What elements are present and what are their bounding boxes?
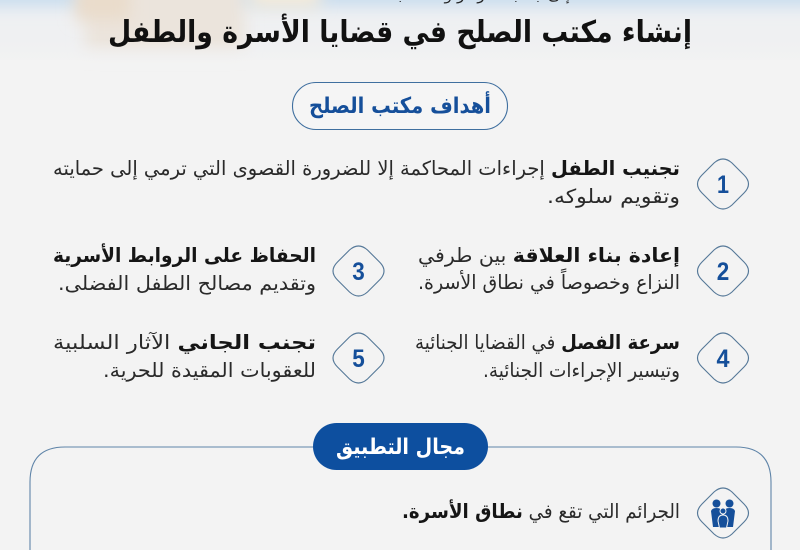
goal 1 xyxy=(53,157,748,209)
goal 4 text xyxy=(415,331,680,382)
goal 1 text: وتقويم سلوكه. xyxy=(547,185,680,208)
goal 3 text: الحفاظ على الروابط الأسرية xyxy=(53,242,316,267)
goal 2 text: إعادة بناء العلاقة بين طرفي xyxy=(418,244,680,267)
goals heading pill: أهداف مكتب الصلح xyxy=(309,90,491,119)
goal 3 text xyxy=(53,242,316,295)
icon: number 3 diamond: 3 xyxy=(352,258,365,286)
scope text: الجرائم التي تقع في نطاق الأسرة. xyxy=(402,498,680,523)
goal 5 xyxy=(53,331,384,383)
goal 4 text: سرعة الفصل في القضايا الجنائية xyxy=(415,331,680,354)
goal 3 text: وتقديم مصالح الطفل الفضلى. xyxy=(58,272,316,295)
goal 4 xyxy=(415,331,748,383)
icon: number 2 diamond: 2 xyxy=(717,258,729,286)
icon: number 5 diamond: 5 xyxy=(352,345,365,373)
goal 2 text: النزاع وخصوصاً في نطاق الأسرة. xyxy=(418,268,680,294)
icon: number 1 diamond xyxy=(698,159,748,209)
icon: number 1 diamond: 1 xyxy=(717,171,729,199)
scope heading pill: مجال التطبيق xyxy=(336,435,465,460)
goal 5 text: تجنب الجاني الآثار السلبية xyxy=(53,331,316,354)
title: إنشاء مكتب الصلح في قضايا الأسرة والطفل xyxy=(108,13,692,50)
goal 1 text xyxy=(53,157,680,208)
goal 5 text: للعقوبات المقيدة للحرية. xyxy=(103,359,316,382)
icon: number 2 diamond xyxy=(698,246,748,296)
panel: scope of application xyxy=(30,423,771,550)
goal 2 xyxy=(418,244,748,296)
panel frame xyxy=(30,447,771,550)
goal 1 text: تجنيب الطفل إجراءات المحاكمة إلا للضرورة القصوى التي ترمي إلى حمايته xyxy=(53,157,680,181)
goal 3 xyxy=(53,242,384,296)
icon: family diamond xyxy=(698,488,748,538)
icon: number 4 diamond xyxy=(698,333,748,383)
goal 4 text: وتيسير الإجراءات الجنائية. xyxy=(483,359,680,382)
goals heading pill xyxy=(292,82,508,130)
icon: number 3 diamond xyxy=(333,246,384,296)
icon: number 4 diamond: 4 xyxy=(716,345,730,373)
scope heading pill xyxy=(313,423,488,470)
header photo background xyxy=(0,0,800,70)
goal 5 text xyxy=(53,331,316,382)
icon: number 5 diamond xyxy=(333,333,384,383)
goal 2 text xyxy=(418,244,680,294)
